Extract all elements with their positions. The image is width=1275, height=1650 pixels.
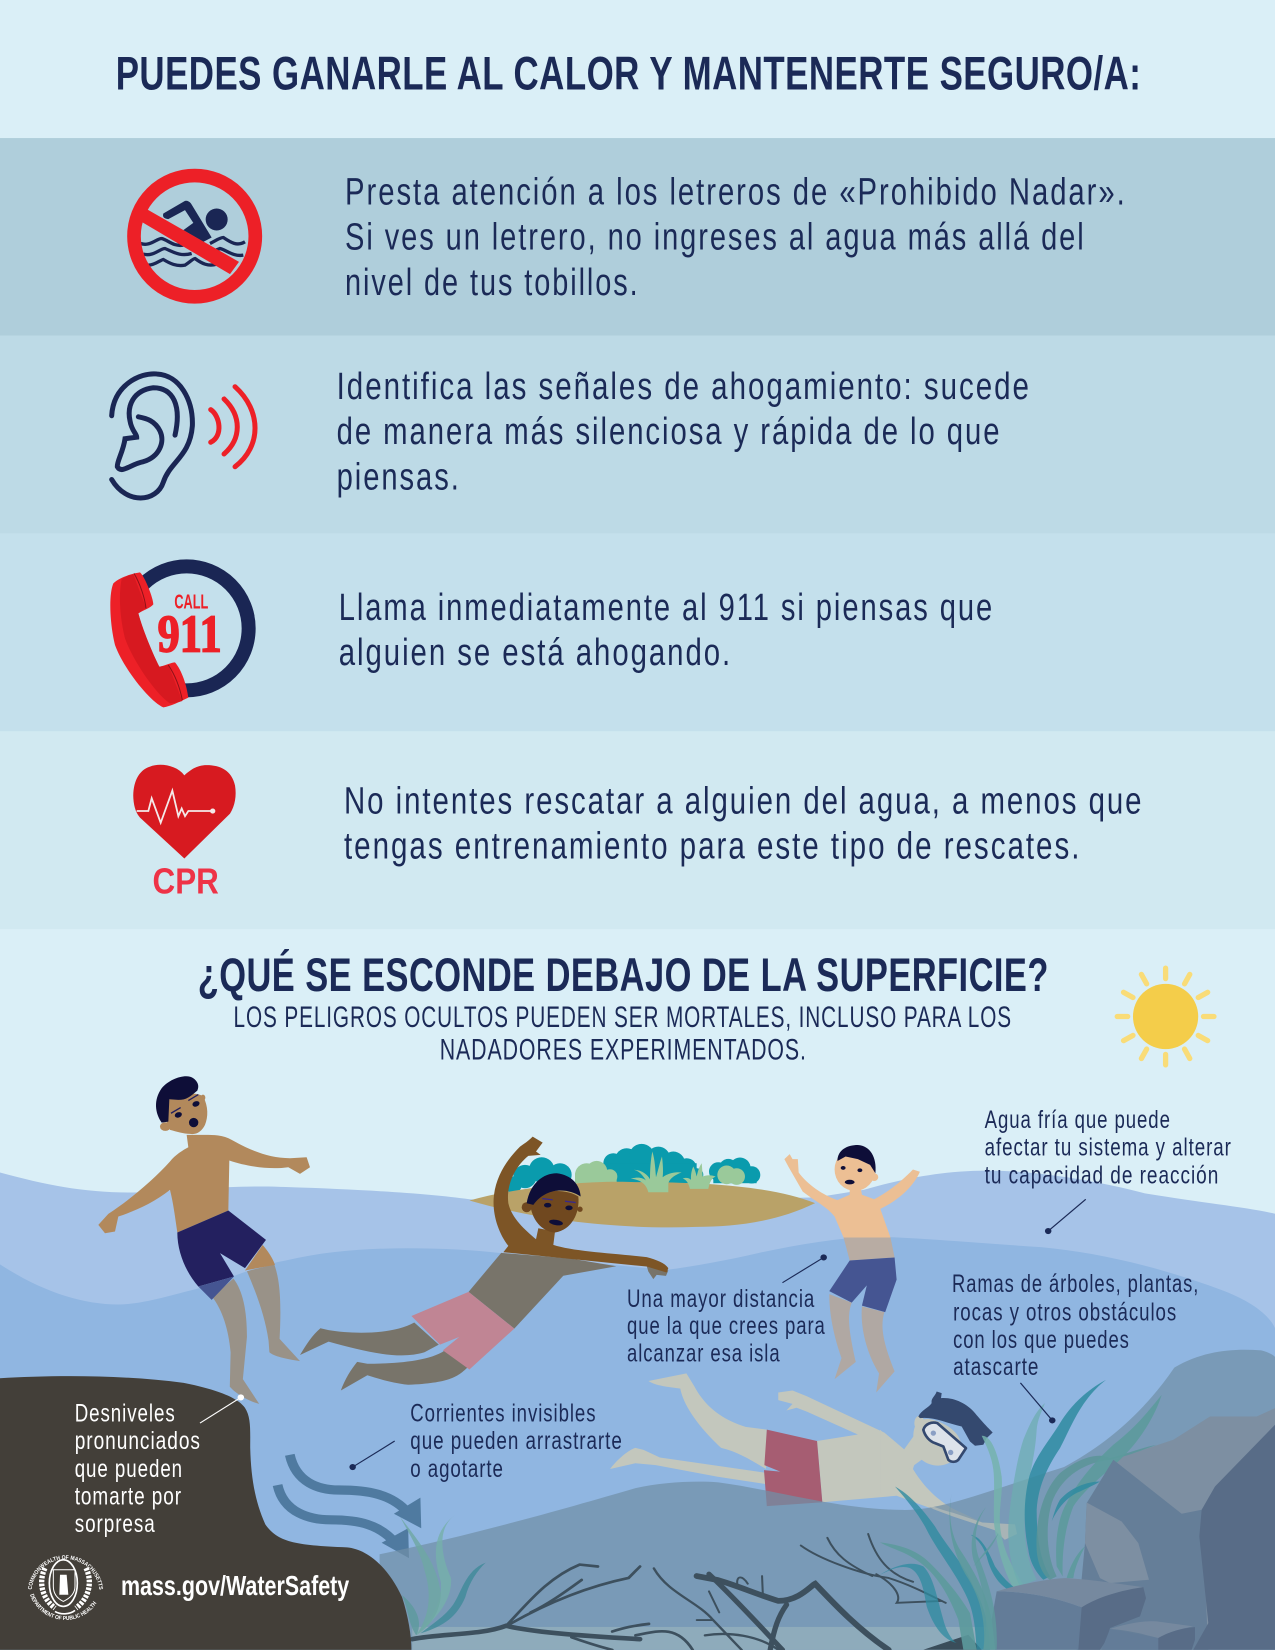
icon: ear with sound waves [112,374,255,498]
dark bank [0,1376,411,1650]
callout: drop-offs [75,1399,201,1538]
lighter floor strip [412,1627,1106,1650]
callout: drop-offs: sorpresa [75,1510,156,1538]
text: call 911: alguien se está ahogando. [339,632,732,674]
panel: call 911 [0,534,1275,731]
callout: obstacles: con los que puedes [953,1326,1130,1354]
text: rescue training: tengas entrenamiento para este tipo de rescates. [344,826,1081,868]
callout: cold water [985,1106,1232,1190]
panel: no swimming signs [0,138,1275,336]
icon: no swimming [134,176,255,297]
text: rescue training [344,780,1144,868]
island bushes [505,1144,760,1193]
callout: distance: alcanzar esa isla [627,1340,781,1368]
back water wave [0,1171,1275,1547]
island [469,1182,815,1227]
front water wave [0,1237,1275,1650]
icon: phone call 911 [110,566,249,707]
icon: CPR heart [133,765,236,901]
text: no swimming signs [345,171,1127,304]
callout: currents: Corrientes invisibles [410,1399,596,1427]
text: drowning signs: de manera más silenciosa y rápida de lo que [337,411,1001,453]
heading: what hides below the surface: NADADORES EXPERIMENTADOS. [440,1034,807,1067]
lower arm of the swimmer seen through the dune [921,1501,1017,1540]
callout: obstacles: atascarte [953,1353,1039,1381]
callout: currents [410,1399,623,1483]
callout: distance: Una mayor distancia [627,1285,815,1313]
seaweed: left cluster [400,1515,486,1635]
swimmer: boy on the right [784,1145,920,1392]
logo: department of public health seal: COMMONWEALTH OF MASSACHUSETTS [28,1555,104,1590]
heading: what hides below the surface [198,948,1049,1067]
callout: distance: que la que crees para [627,1312,826,1340]
callout markers [200,1199,1086,1470]
text: drowning signs: piensas. [337,456,461,498]
text: no swimming signs: nivel de tus tobillos. [345,262,640,304]
callout: obstacles: rocas y otros obstáculos [953,1298,1177,1326]
icon: phone call 911: CALL [174,590,208,613]
panel: rescue training [0,731,1275,929]
icon: CPR heart: CPR [153,861,219,901]
callout: obstacles [952,1270,1199,1381]
callout: currents: que pueden arrastrarte [410,1427,623,1455]
callout: currents: o agotarte [410,1455,504,1483]
branches [412,1534,946,1650]
swimmer: boy on the left [98,1076,310,1404]
panel: drowning signs [0,336,1275,534]
icon: sun [1117,968,1214,1065]
text: drowning signs [337,366,1031,498]
rocks and seaweed: right cluster [880,1380,1275,1650]
callout: drop-offs: pronunciados [75,1427,201,1455]
logo: department of public health seal: DEPARTMENT OF PUBLIC HEALTH [30,1594,96,1620]
illustration: water scene [0,1076,1275,1650]
text: drowning signs: Identifica las señales de ahogamiento: sucede [337,366,1031,408]
text: call 911: Llama inmediatamente al 911 si piensas que [339,587,994,629]
island grass [631,1152,716,1192]
callout: distance [627,1285,826,1368]
callout: drop-offs: Desniveles [75,1399,176,1427]
icon: phone call 911: 911 [158,606,222,664]
callout: drop-offs: que pueden [75,1455,183,1483]
current arrows [278,1455,421,1558]
logo: department of public health seal [28,1555,104,1620]
text: call 911 [339,587,994,674]
swimmer: boy with mask [610,1373,1017,1540]
website link: mass.gov/WaterSafety [121,1570,350,1601]
sea floor dune [380,1350,1275,1650]
swimmer: boy in the centre [300,1137,668,1391]
callout: cold water: Agua fría que puede [985,1106,1171,1134]
callout: drop-offs: tomarte por [75,1483,182,1511]
